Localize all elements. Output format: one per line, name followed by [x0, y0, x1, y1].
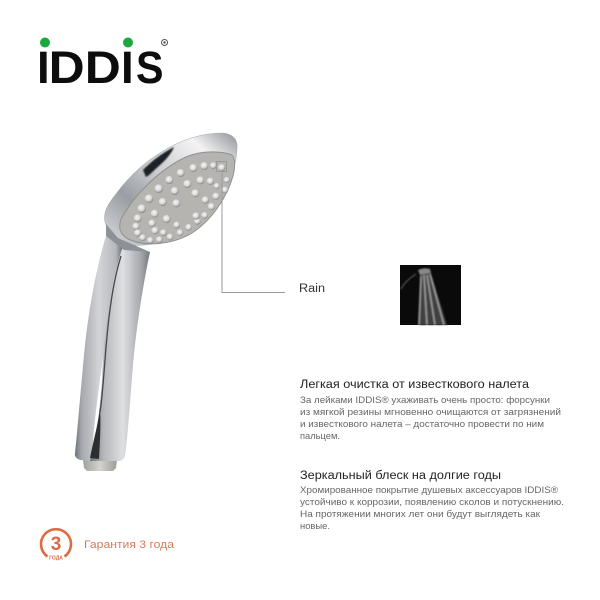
text block: easy cleaning [300, 379, 561, 441]
body: easy cleaning: За лейками IDDIS® ухаживать очень просто: форсунки [300, 394, 550, 405]
icon: 3 year ring: 3 [51, 534, 61, 555]
warranty badge: 3 years [41, 529, 175, 562]
callout leader line to nozzle [216, 162, 285, 292]
head rim [105, 133, 237, 245]
thread connector [83, 460, 117, 471]
handle dark reflection [90, 408, 100, 459]
logo: IDDIS: S [136, 42, 164, 93]
spray face [120, 152, 235, 244]
heading: mirror shine: Зеркальный блеск на долгие годы [300, 470, 501, 482]
icon: 3 year ring: ГОДА [49, 556, 63, 562]
handle left facet [75, 236, 123, 461]
text block: mirror shine [300, 470, 564, 531]
handle seam line [100, 256, 121, 412]
body: mirror shine: новые. [300, 520, 330, 531]
body: mirror shine: На протяжении многих лет они будут выглядеть как [300, 508, 541, 519]
body: mirror shine: устойчиво к коррозии, появлению сколов и потускнению. [300, 496, 564, 507]
warranty text: Гарантия 3 года [84, 539, 175, 551]
body: easy cleaning [300, 394, 561, 441]
body: easy cleaning: из мягкой резины мгновенно очищаются от загрязнений [300, 406, 561, 417]
body: mirror shine: Хромированное покрытие душевых аксессуаров IDDIS® [300, 484, 558, 495]
body: mirror shine [300, 484, 564, 531]
thumbnail: rain spray photo [400, 265, 461, 325]
logo: IDDIS [37, 38, 168, 93]
label: Rain: Rain [299, 283, 325, 295]
body: easy cleaning: и известкового налета – достаточно провести по ним [300, 418, 544, 429]
rim dark reflection [143, 147, 174, 177]
logo: IDDIS: D [49, 42, 85, 93]
product photo: shower head [75, 133, 237, 471]
handle right facet [90, 246, 150, 461]
icon: 3 year ring [41, 529, 71, 562]
logo: IDDIS: D [85, 42, 121, 93]
head collar [106, 224, 150, 252]
logo: IDDIS: I [121, 42, 134, 93]
nozzles [132, 162, 230, 244]
body: easy cleaning: пальцем. [300, 430, 340, 441]
heading: easy cleaning: Легкая очистка от известкового налета [300, 379, 530, 391]
logo: IDDIS: I [37, 42, 50, 93]
